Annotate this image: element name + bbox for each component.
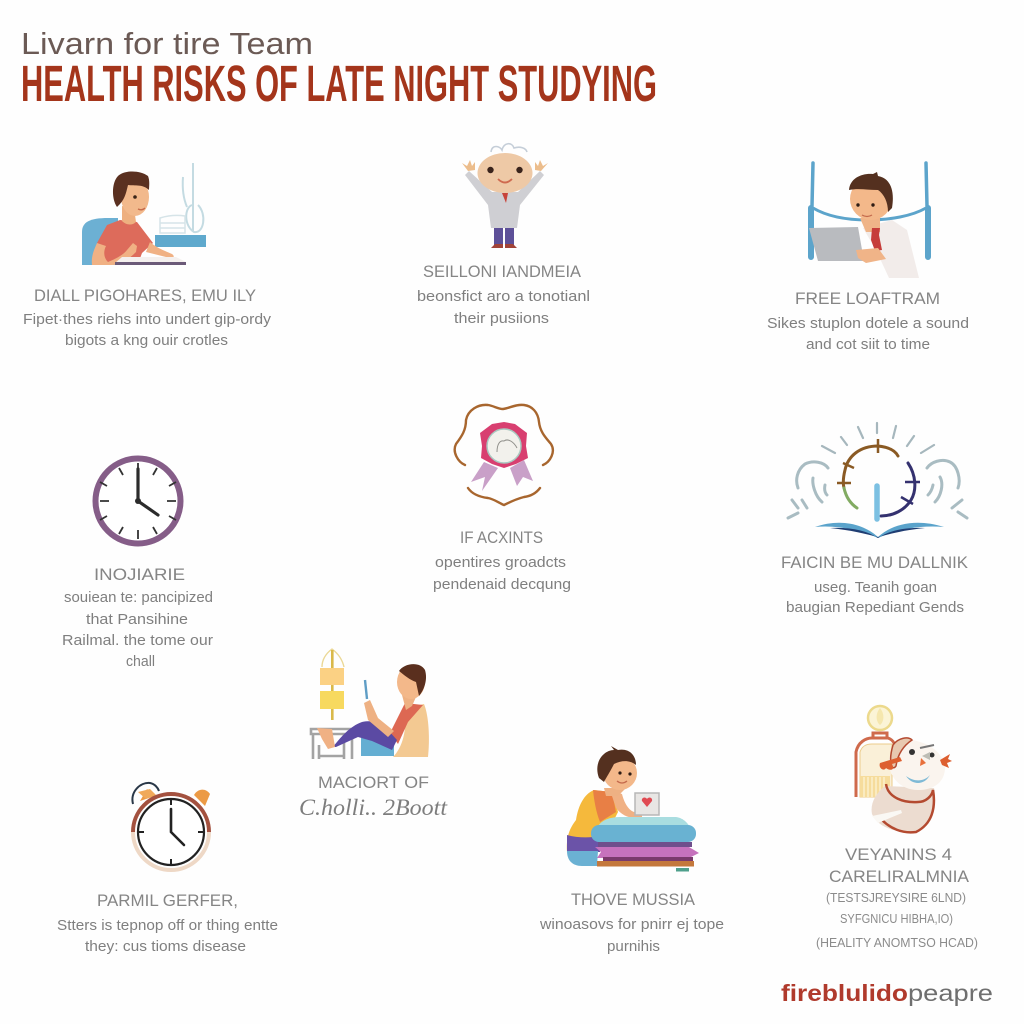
description: useg. Teanih goan (814, 580, 937, 596)
description (417, 289, 590, 327)
description (539, 917, 724, 955)
panel: dial over open book (781, 423, 968, 616)
heading: FREE LOAFTRAM (795, 290, 940, 308)
description: SYFGNICU HIBHA,IO) (840, 912, 953, 926)
icon: bald character with raised arms (462, 144, 548, 248)
panel: seated student with pencil (299, 649, 448, 820)
description: winoasovs for pnirr ej tope (539, 917, 724, 933)
heading: FAICIN BE MU DALLNIK (781, 554, 968, 572)
icon: wall clock (96, 458, 180, 544)
description: baugian Repediant Gends (786, 600, 964, 616)
description: Fipet·thes riehs into undert gip-ordy (23, 312, 272, 328)
title block (21, 26, 657, 112)
panel: happy character (417, 144, 590, 327)
panel: man with laptop (767, 163, 969, 353)
icon: man with laptop between blue posts (809, 163, 928, 278)
icon: rosette badge (455, 405, 553, 505)
description (816, 891, 978, 950)
description: souiean te: pancipized (64, 590, 213, 606)
description (786, 580, 964, 616)
description: chall (126, 654, 155, 670)
icon: boy with stacked pillows (567, 746, 699, 872)
description: (TESTSJREYSIRE 6LND) (826, 891, 966, 905)
icon: dial over open book (788, 423, 967, 538)
description: bigots a kng ouir crotles (65, 333, 228, 349)
panel: student at desk (23, 163, 272, 349)
panel: wall clock (62, 458, 213, 670)
panel: rosette badge (433, 405, 571, 593)
heading: IF ACXINTS (460, 529, 543, 547)
description: and cot siit to time (806, 337, 930, 353)
description: Sikes stuplon dotele a sound (767, 316, 969, 332)
heading: MACIORT OF (318, 774, 429, 792)
icon: alarm clock (132, 783, 210, 870)
description (433, 555, 571, 593)
description: their pusiions (454, 311, 549, 327)
description: Railmal. the tome our (62, 633, 213, 649)
heading: SEILLONI IANDMEIA (423, 263, 581, 281)
description: that Pansihine (86, 612, 188, 628)
icon: seated student with pencil (311, 649, 429, 759)
panel: lantern mascot (816, 706, 978, 950)
heading: THOVE MUSSIA (571, 891, 695, 909)
description (57, 918, 278, 955)
description: Stters is tepnop off or thing entte (57, 918, 278, 934)
heading: VEYANINS 4 (845, 846, 952, 864)
panel: alarm clock (57, 783, 278, 955)
logo (781, 980, 993, 1006)
description (62, 590, 213, 670)
description: pendenaid decqung (433, 577, 571, 593)
description: they: cus tioms disease (85, 939, 246, 955)
description: (HEALITY ANOMTSO HCAD) (816, 936, 978, 950)
description (23, 312, 272, 349)
script line: C.holli.. 2Boott (299, 795, 448, 820)
description (767, 316, 969, 353)
logo: peapre (908, 980, 993, 1006)
icon: lantern and mascot (856, 706, 952, 832)
description: beonsfict aro a tonotianl (417, 289, 590, 305)
panel: boy with stacked pillows (539, 746, 724, 955)
heading: PARMIL GERFER, (97, 892, 238, 910)
description: opentires groadcts (435, 555, 566, 571)
heading: CARELIRALMNIA (829, 868, 969, 886)
subtitle: Livarn for tire Team (21, 26, 313, 61)
heading (829, 846, 969, 886)
logo: fireblulido (781, 980, 908, 1006)
description: purnihis (607, 939, 660, 955)
heading: INOJIARIE (94, 566, 185, 584)
icon: student at desk (82, 163, 206, 265)
heading: DIALL PIGOHARES, EMU ILY (34, 287, 256, 305)
